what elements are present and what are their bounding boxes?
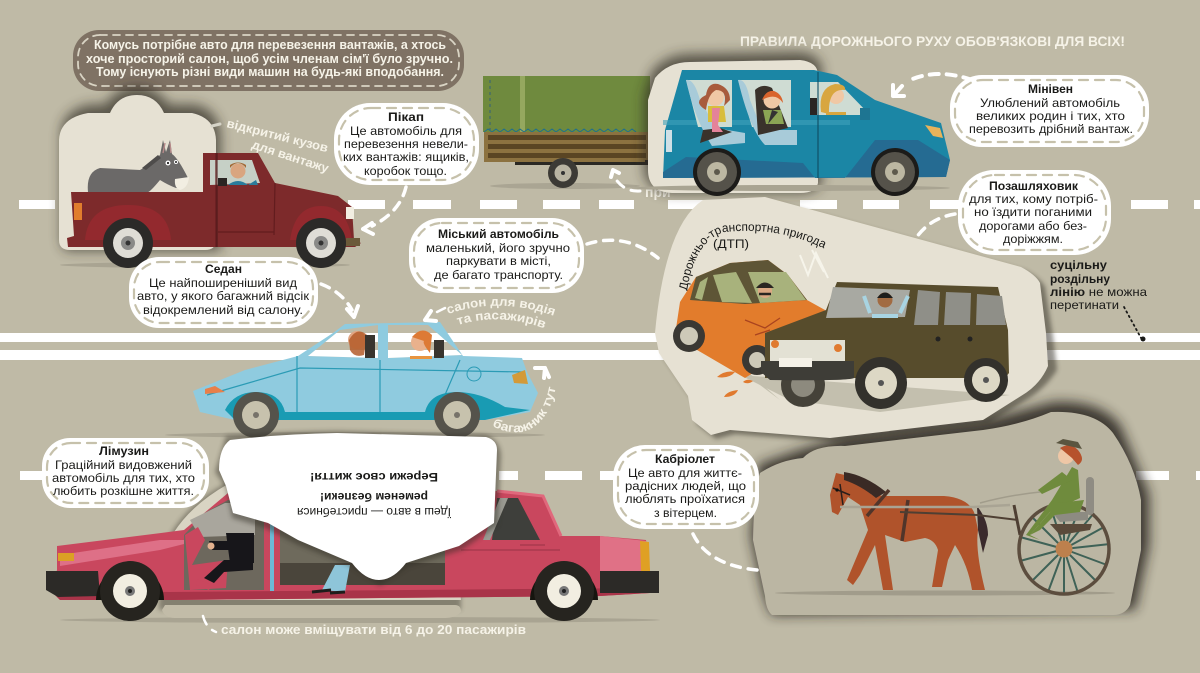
bubble: minivan [950,75,1149,147]
safety note flap: Бережи своє життя! [310,470,438,484]
crash illustration [655,197,1060,444]
truck body [67,153,361,247]
bubble: sedan [129,257,318,328]
bubble: minivan: Улюблений автомобіль [980,96,1120,110]
intro note [73,30,464,91]
intro note: Комусь потрібне авто для перевезення вантажів, а хтось [94,38,446,52]
label: cabin: салон для водія [447,299,555,316]
sedan windows [308,325,462,359]
limo card [159,482,461,610]
limousine caption [203,616,526,637]
bubble: off-road: Позашляховик [989,179,1079,193]
bubble: minivan: великих родин і тих, хто [976,109,1125,123]
truck wheels [103,218,346,268]
safety note flap: Їдеш в авто — пристебнися [297,505,451,519]
driver [980,439,1084,540]
label: open cargo bed: для вантажу [250,138,331,176]
bubble: limousine: автомобіль для тих, хто [52,471,195,485]
bubble: convertible: Це авто для життє- [628,466,742,480]
note: solid line: роздільну [1050,272,1110,286]
label: cabin: та пасажирів [456,312,546,328]
bubble: off-road: дорогами або без- [979,219,1087,233]
bubble: off-road: доріжжям. [1003,232,1063,246]
note: solid line: суцільну [1050,258,1107,272]
bubble: city car: паркувати в місті, [446,254,551,268]
horse carriage illustration [753,407,1144,615]
label: open cargo bed: відкритий кузов [225,116,330,155]
minivan wheels [693,148,919,196]
convertible arrow [693,534,757,570]
bubble: pickup: ких вантажів: ящиків, [343,150,469,164]
bubble: pickup: Пікап [388,110,424,124]
bubble: convertible: Кабріолет [655,452,715,466]
safety note flap: ременем безпеки! [320,490,428,504]
bubble: sedan: Це найпоширеніший вид [149,276,297,290]
label: open cargo bed [212,116,331,176]
bubble: city car: Міський автомобіль [438,227,559,241]
bubble: minivan: Мінівен [1028,82,1073,96]
bubble: pickup [334,103,479,185]
limousine caption: салон може вміщувати від 6 до 20 пасажирів [221,623,526,637]
note: solid line: перетинати [1050,298,1119,312]
label: trunk [494,366,556,432]
horse [830,472,1010,590]
carriage [900,477,1110,595]
sedan illustration [165,322,545,438]
bubble: city car: маленький, його зручно [426,241,570,255]
intro note: хоче просторий салон, щоб усім членам сім'ї було зручно. [86,52,453,66]
SUV [761,282,1009,409]
label: trailer [611,170,671,200]
trailer [483,76,667,189]
front window with driver [810,82,870,115]
label: trunk: багажник тут [494,386,556,432]
minivan illustration [630,56,950,196]
note: solid line: лінію не можна [1050,285,1147,299]
donkey [88,140,189,192]
label: cabin [422,299,555,328]
bubble: limousine: любить розкішне життя. [53,484,194,498]
heading: ПРАВИЛА ДОРОЖНЬОГО РУХУ ОБОВ'ЯЗКОВІ ДЛЯ ВСІХ! [740,33,1125,49]
limousine illustration [46,482,660,623]
road markings [0,200,1200,480]
bubble: convertible: радісних людей, що [625,479,746,493]
bubble: convertible: з вітерцем. [654,506,717,520]
bubble: city car [409,218,584,293]
bubble: sedan: Седан [205,262,242,276]
rear seat window with child [686,80,745,146]
bubble: minivan: перевозить дрібний вантаж. [969,122,1133,136]
bubble: sedan: авто, у якого багажний відсік [137,289,310,303]
pickup illustration [59,91,361,268]
bubble: city car: де багато транспорту. [434,268,563,282]
city car arrow [587,240,658,258]
bubble: off-road: для тих, кому потріб- [969,192,1098,206]
intro note: Тому існують різні види машин на будь-які вподобання. [96,65,444,79]
pickup arrow [363,187,406,234]
bubble: convertible: люблять проїхатися [625,492,745,506]
crash caption: (ДТП) [713,237,749,251]
orange car [673,260,825,397]
sedan wheels [233,392,480,438]
bubble: pickup: Це автомобіль для [350,124,462,138]
sedan arrow [321,284,358,317]
crash caption: Дорожньо-транспортна пригода [679,224,826,291]
off-road arrow [916,214,955,238]
limo cabin [184,500,445,593]
label: trailer: при [645,184,671,200]
bubble: pickup: коробок тощо. [364,164,447,178]
limo wheels [96,561,598,621]
minivan arrow [893,74,972,96]
safety note flap [215,431,501,586]
bubble: off-road: но їздити поганими [974,205,1092,219]
bubble: sedan: відокремлений від салону. [143,303,303,317]
bubble: off-road [958,170,1111,255]
bubble: limousine: Лімузин [99,444,149,458]
bubble: limousine: Граційний видовжений [55,458,192,472]
middle seat window with child [738,80,797,145]
bubble: convertible [613,445,759,529]
note: solid line [1050,258,1147,342]
bubble: limousine [42,438,209,508]
bubble: pickup: перевезення невели- [344,137,468,151]
